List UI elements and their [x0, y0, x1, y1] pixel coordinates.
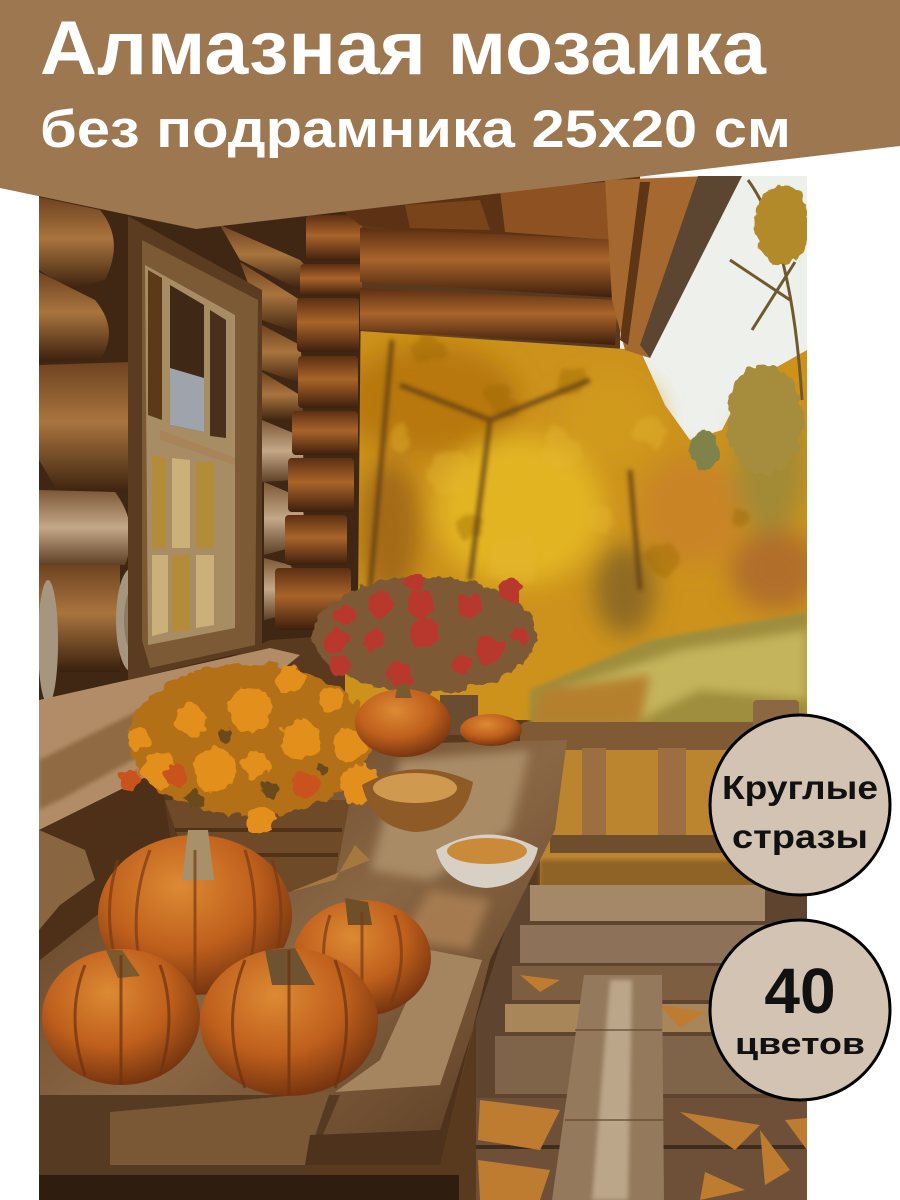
badge: round rhinestones: Круглые — [722, 769, 878, 806]
title: Алмазная мозаика — [40, 6, 767, 91]
subtitle: без подрамника 25х20 см — [40, 100, 791, 159]
sky — [620, 176, 807, 466]
autumn forest — [340, 180, 820, 720]
porch floor — [476, 885, 807, 1200]
badge: 40 colours: 40 — [764, 955, 836, 1027]
badge: round rhinestones — [710, 715, 890, 895]
grass path — [530, 612, 807, 730]
leaves ground behind railing — [540, 750, 728, 885]
bench — [552, 975, 664, 1200]
log wall — [39, 196, 362, 700]
badge: round rhinestones: стразы — [732, 818, 868, 855]
railing — [520, 700, 799, 885]
banner — [0, 0, 900, 229]
window — [128, 216, 262, 680]
small dishes — [362, 769, 538, 888]
lower log wall and ledge — [39, 648, 300, 960]
pumpkins — [42, 684, 522, 1096]
orange flowers and basket — [119, 664, 380, 892]
sawn log ends — [39, 362, 128, 486]
painting: autumn porch — [38, 176, 820, 1200]
table top — [39, 740, 567, 1200]
badge: 40 colours — [710, 920, 890, 1100]
red flowers — [313, 573, 537, 735]
badge: 40 colours: цветов — [735, 1026, 865, 1061]
roof beams — [300, 176, 742, 358]
